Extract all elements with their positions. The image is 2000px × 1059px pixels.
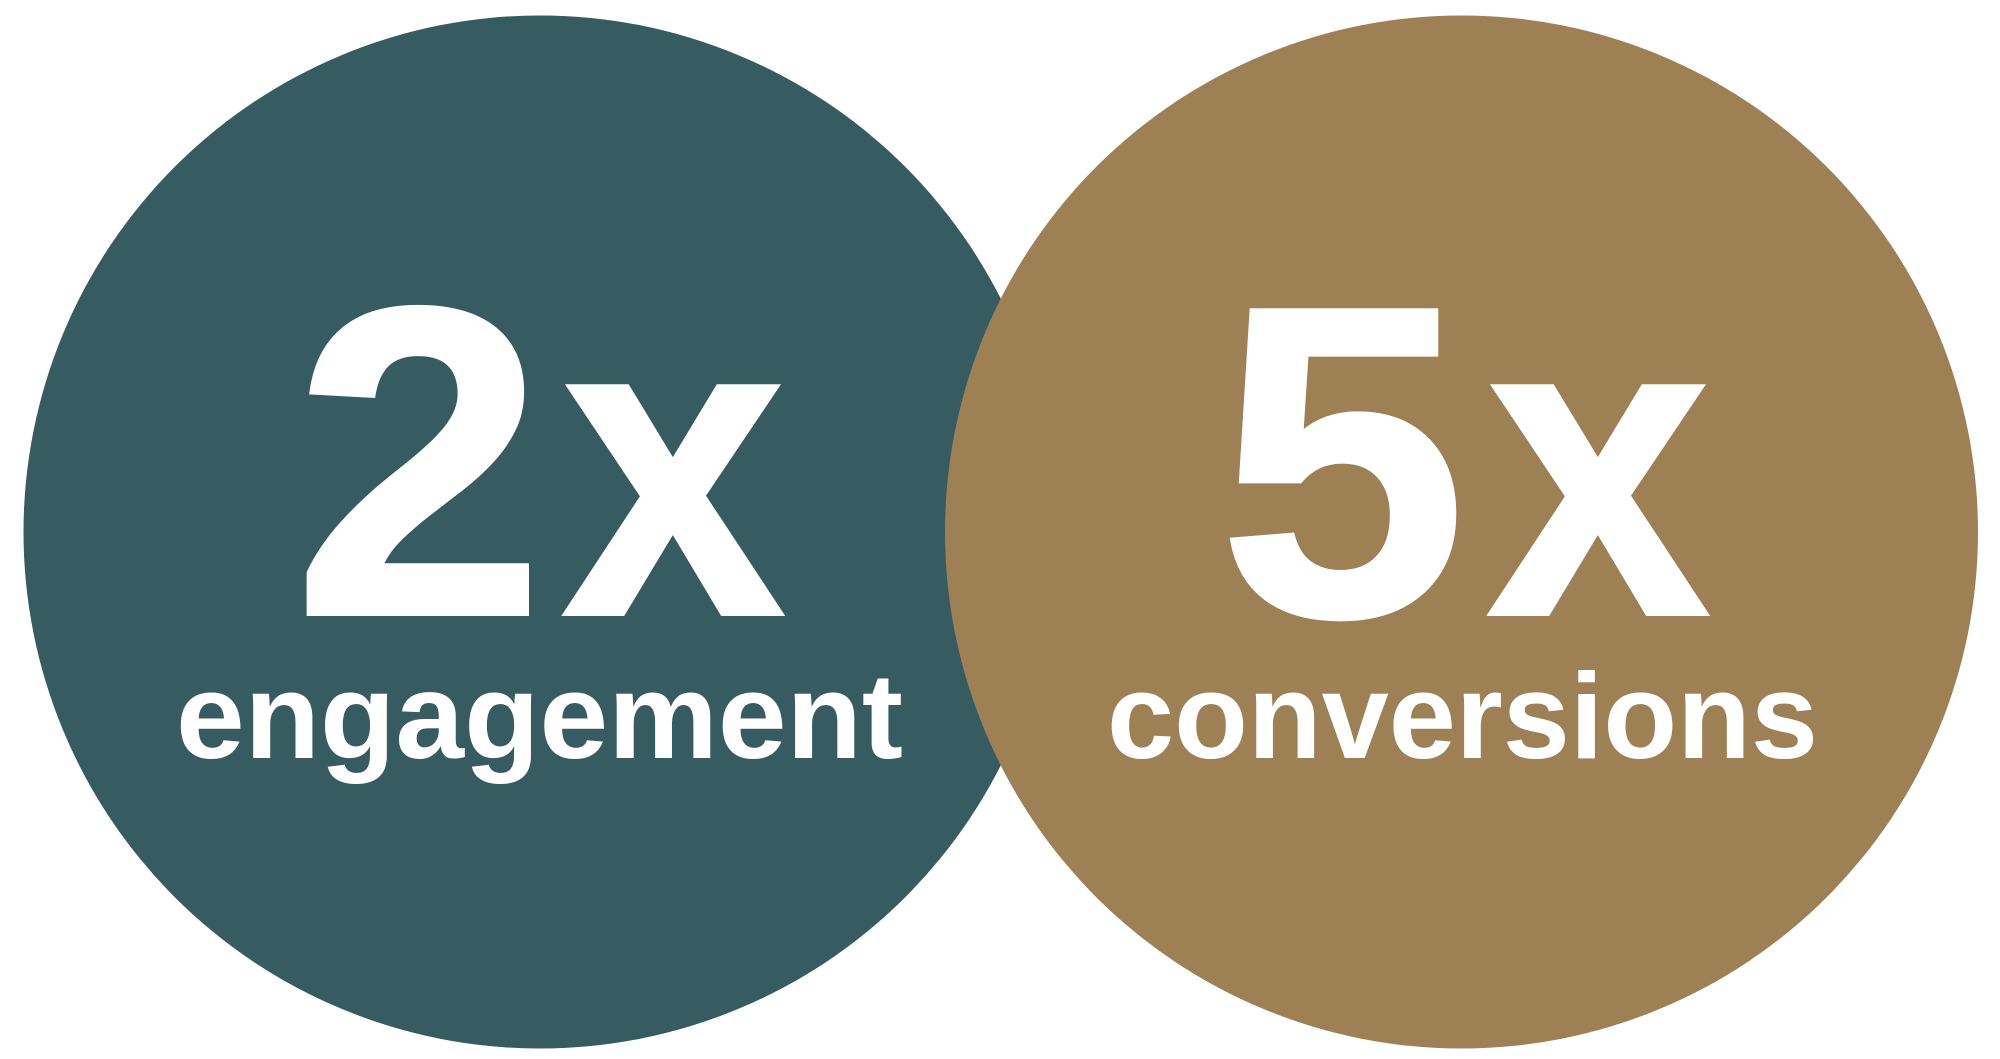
panel: engagement circle <box>24 16 1056 1048</box>
stat: 5x: x <box>1487 224 1712 706</box>
label: conversions: conversions <box>1107 648 1818 784</box>
panel: conversions circle <box>945 16 1978 1048</box>
stat: 2x: 2 <box>292 216 546 709</box>
stat: 2x <box>292 216 787 709</box>
label: engagement: engagement <box>176 648 903 784</box>
stat: 2x: x <box>562 224 787 706</box>
stat: 5x: 5 <box>1218 213 1467 710</box>
stat: 5x <box>1218 213 1712 710</box>
